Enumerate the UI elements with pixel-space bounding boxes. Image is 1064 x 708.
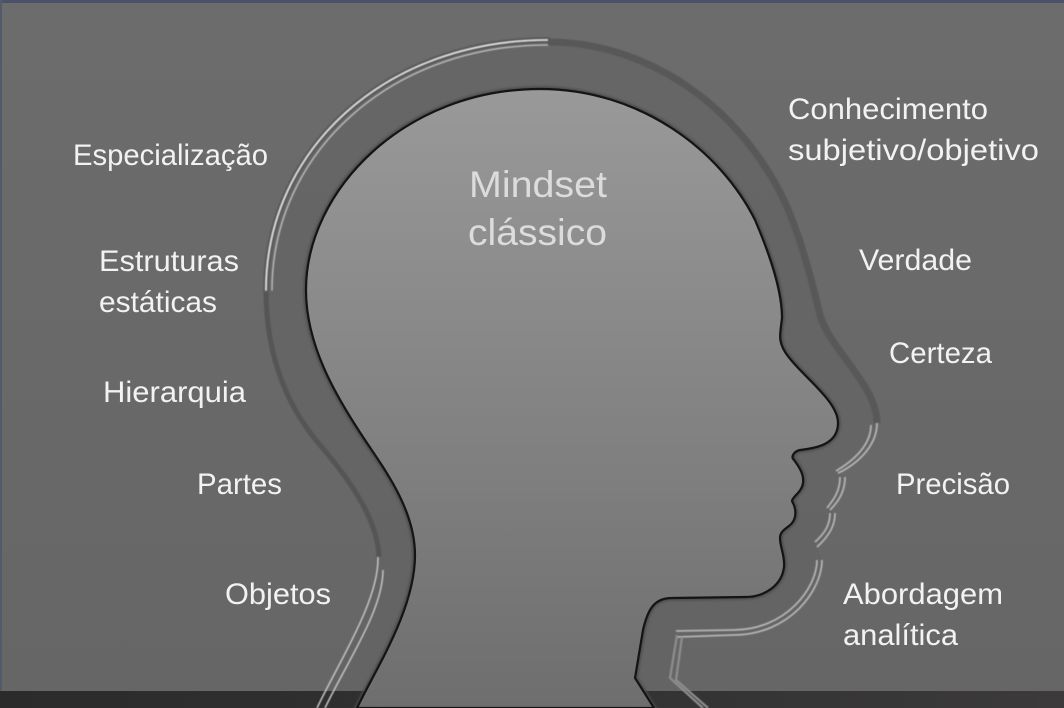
- label: Conhecimento subjetivo/objetivo: Conhecimento: [788, 93, 988, 126]
- label: Objetos: Objetos: [225, 578, 331, 611]
- center title: Mindset: [469, 164, 608, 205]
- label: Estruturas estáticas: Estruturas: [99, 245, 239, 278]
- label: Abordagem analítica: Abordagem: [843, 578, 1003, 611]
- label: Hierarquia: Hierarquia: [103, 376, 246, 409]
- label: Certeza: Certeza: [889, 337, 992, 370]
- outer contour: light lower left lines: [317, 557, 383, 708]
- outer contour: light crown lines: [266, 40, 548, 290]
- left labels: [73, 139, 331, 611]
- left edge strip: [0, 0, 2, 708]
- label: Conhecimento subjetivo/objetivo: [788, 93, 1039, 167]
- outer contour: dark forehead band: [548, 42, 877, 423]
- label: Conhecimento subjetivo/objetivo: subjetivo/objetivo: [788, 134, 1039, 167]
- bottom dark bar: [0, 691, 1064, 708]
- label: Partes: Partes: [197, 468, 282, 501]
- label: Abordagem analítica: analítica: [843, 619, 958, 652]
- label: Estruturas estáticas: [99, 245, 239, 319]
- label: Verdade: Verdade: [859, 244, 972, 277]
- center title: [468, 164, 608, 253]
- label: Precisão: Precisão: [896, 468, 1010, 501]
- outer band: [266, 40, 877, 708]
- label: Abordagem analítica: [843, 578, 1003, 652]
- outer contour: light jaw and nose lines: [676, 423, 877, 637]
- label: Estruturas estáticas: estáticas: [99, 286, 217, 319]
- outer contour: dark left flank: [266, 290, 379, 557]
- outer contour: neck lines: [670, 635, 708, 708]
- center title: clássico: [468, 212, 607, 253]
- inner head shape: [306, 89, 838, 708]
- top edge strip: [0, 0, 1064, 3]
- right labels: [788, 93, 1039, 652]
- label: Especialização: Especialização: [73, 139, 268, 172]
- inner head glow: [306, 89, 838, 708]
